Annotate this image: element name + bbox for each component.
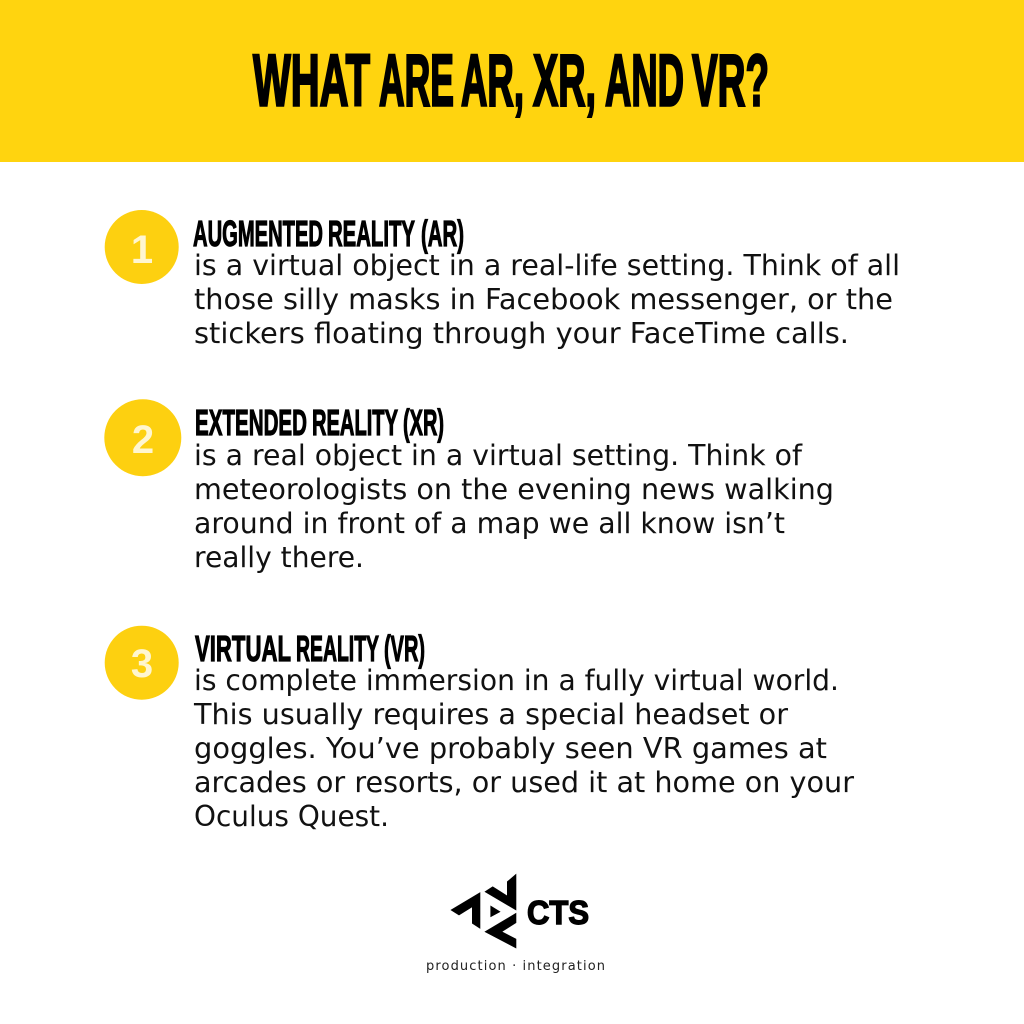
text: virtual reality description: arcades or resorts, or used it at home on your [194,766,854,799]
text: extended reality description [194,439,834,574]
text: virtual reality description: Oculus Quest. [194,800,389,833]
number badge 1 [105,210,179,284]
text: augmented reality description: those silly masks in Facebook messenger, or the [194,283,893,316]
title: AND [605,40,684,122]
text: augmented reality description [194,249,900,350]
text: virtual reality description: is complete immersion in a fully virtual world. [194,664,839,697]
title: ARE [379,40,454,122]
text: virtual reality description [193,664,854,833]
section 2: extended reality [104,399,834,574]
number badge 3: 3 [131,642,153,686]
heading: virtual reality: VIRTUAL [195,628,291,669]
text: extended reality description: meteorologists on the evening news walking [194,473,834,506]
heading: virtual reality: REALITY [296,628,379,669]
heading: extended reality: EXTENDED [195,402,307,443]
title: XR, [533,40,596,122]
number badge 2 [104,399,181,476]
text: extended reality description: is a real object in a virtual setting. Think of [194,439,803,472]
text: virtual reality description: goggles. You’ve probably seen VR games at [194,732,827,765]
title: AR, [461,40,524,122]
heading: extended reality: REALITY [312,402,398,443]
text: extended reality description: around in front of a map we all know isn’t [194,507,785,540]
text: augmented reality description: stickers floating through your FaceTime calls. [194,317,849,350]
heading: virtual reality [195,628,425,669]
header band [0,0,1024,162]
text: virtual reality description: This usually requires a special headset or [193,698,788,731]
section 1: augmented reality [105,210,900,350]
number badge 2: 2 [132,418,154,462]
number badge 1: 1 [131,228,153,272]
logo tagline: production · integration [426,959,605,974]
logo wordmark: CTS [527,894,589,931]
heading: augmented reality: REALITY [328,213,415,254]
logo: CTS [426,874,605,974]
title: WHAT [253,40,370,122]
title [253,40,769,122]
section 3: virtual reality [105,626,854,833]
heading: augmented reality: AUGMENTED [193,213,323,254]
heading: virtual reality: (VR) [384,628,425,669]
icon: CTS triangular mark [451,874,516,948]
number badge 3 [105,626,179,700]
title: VR? [692,40,769,122]
heading: extended reality: (XR) [403,402,444,443]
text: augmented reality description: is a virtual object in a real-life setting. Think of all [194,249,900,282]
heading: augmented reality: (AR) [421,213,464,254]
text: extended reality description: really there. [194,541,364,574]
